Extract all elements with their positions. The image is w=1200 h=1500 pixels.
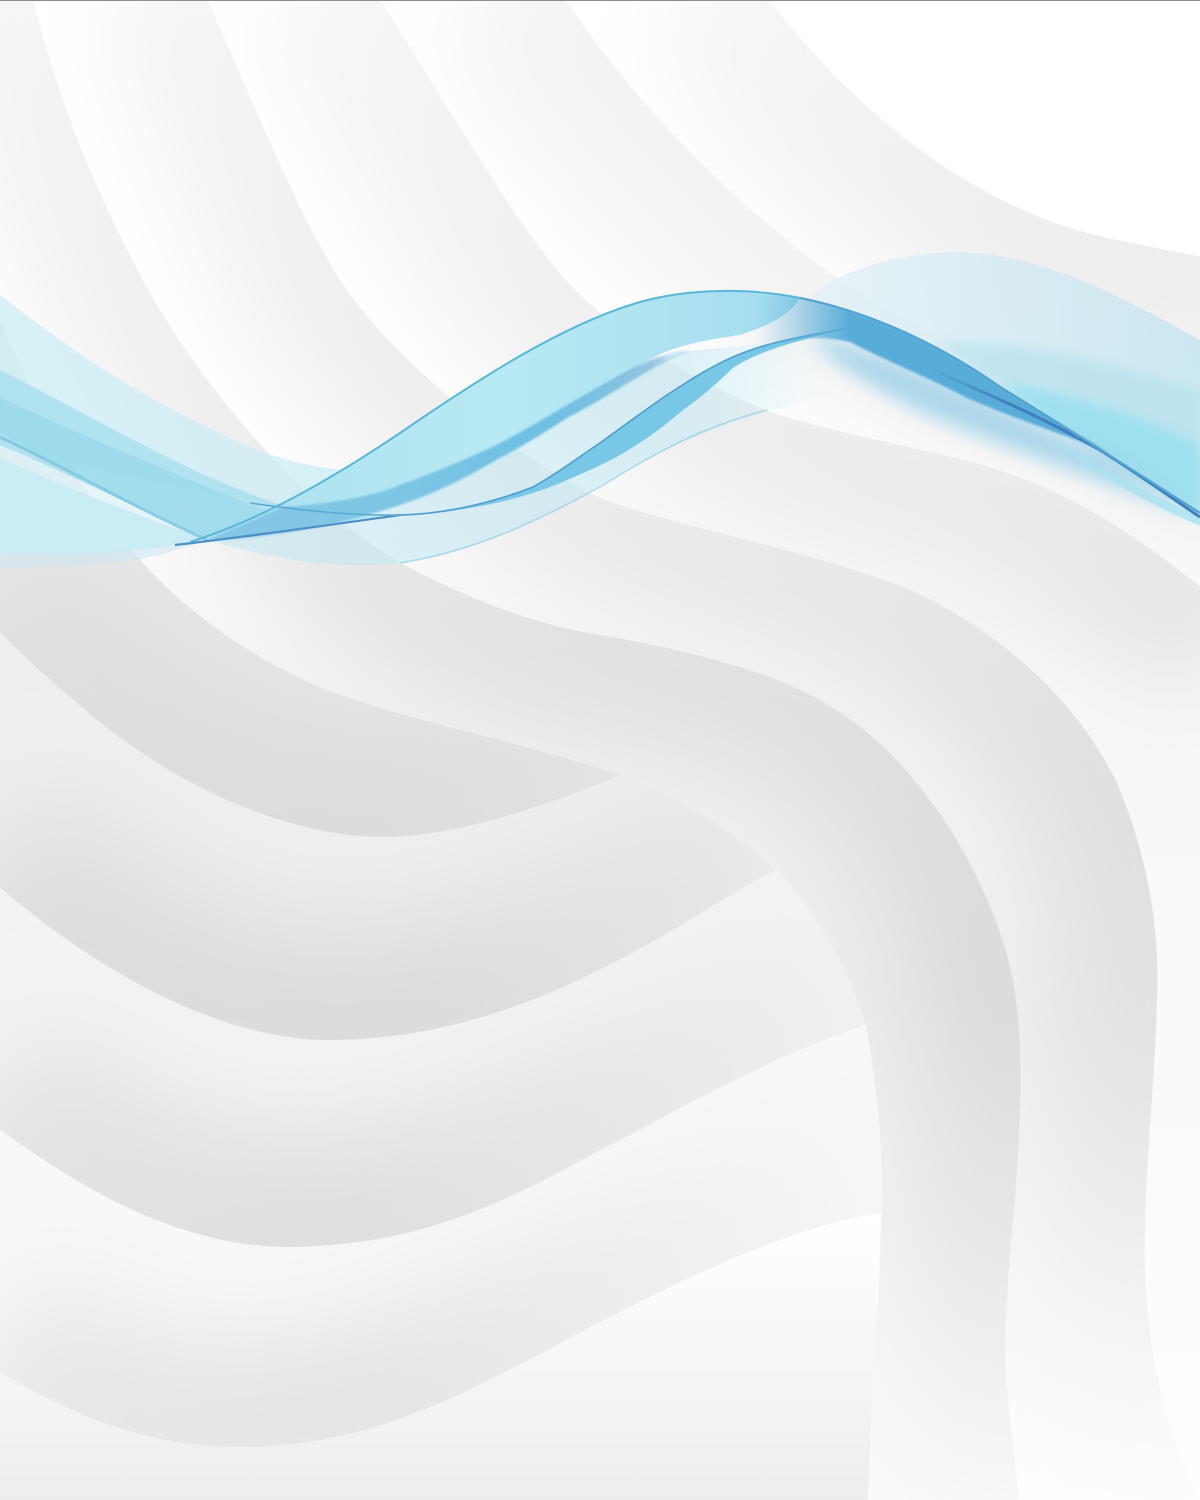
band: outer vertical sweep bbox=[155, 1, 1158, 1340]
thin top border line bbox=[0, 0, 1200, 1]
band: third from top right bbox=[335, 1, 1200, 762]
ribbon: lower edge line bbox=[400, 410, 767, 563]
ribbon: right soft wash below strand bbox=[810, 335, 1200, 520]
ribbon: large central sheet bbox=[190, 291, 800, 542]
ribbon: left strand line bbox=[0, 437, 207, 540]
ribbon: left pale gap fill bbox=[0, 440, 207, 553]
ribbon: lower pale sheet bbox=[207, 328, 850, 565]
band: upper left dark wedge bbox=[0, 560, 620, 837]
ribbon: lower left sheet bbox=[0, 458, 204, 553]
band: lower left second wedge bbox=[0, 784, 774, 1040]
ribbon: left darker stripe bbox=[0, 398, 300, 538]
ribbon: right cyan band bbox=[1010, 385, 1200, 517]
band: top right bbox=[729, 2, 1200, 340]
ribbon: right blue wedge bbox=[755, 296, 1110, 453]
band: lower left third wedge bbox=[0, 950, 844, 1247]
ribbon: central lower strand bbox=[400, 328, 850, 516]
band: lower left fourth wedge bbox=[0, 1088, 882, 1447]
ribbon: crossing upper line bbox=[250, 503, 400, 515]
ribbon: central lower strand edge bbox=[400, 328, 850, 515]
ribbon: lower left faint edge bbox=[0, 540, 207, 567]
ribbon: top edge falling bbox=[800, 298, 1200, 513]
ribbon: crossing dark line bbox=[175, 515, 400, 545]
ribbon: left pale sheet bbox=[0, 295, 400, 507]
ribbon: top edge rising bbox=[190, 291, 800, 542]
ribbon: right inner shade bbox=[940, 342, 1200, 513]
ribbon: central upper strand bbox=[207, 348, 690, 540]
blue translucent ribbon bbox=[0, 252, 1200, 567]
ribbon: left medium sheet bbox=[0, 370, 400, 540]
ribbon: right dark line bbox=[930, 368, 1200, 517]
ribbon: right lower cyan sliver bbox=[1040, 432, 1200, 526]
band: lower left base bbox=[0, 1213, 881, 1500]
band: second from top right bbox=[506, 1, 1200, 556]
ribbon: pale right veil bbox=[810, 252, 1200, 513]
